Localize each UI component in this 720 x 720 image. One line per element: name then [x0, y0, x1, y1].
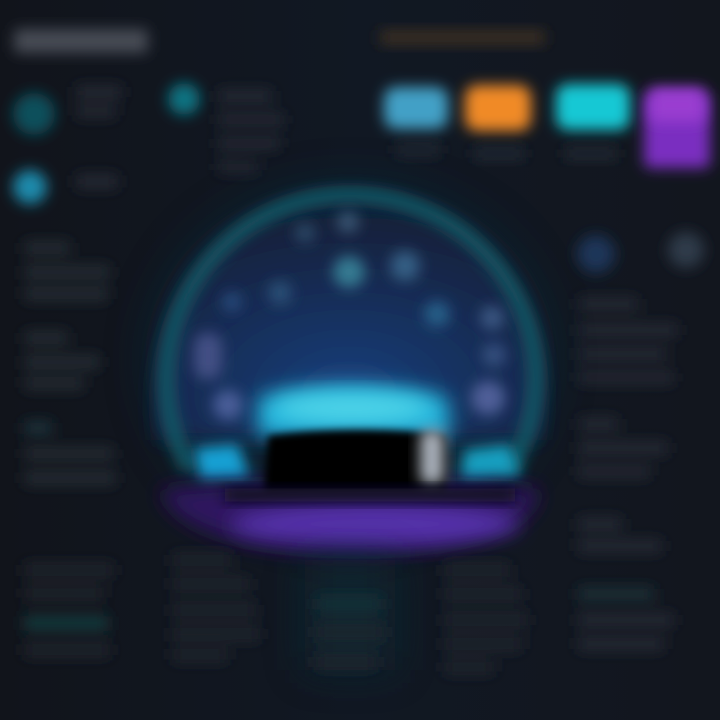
right column text	[577, 232, 704, 650]
left top icons and labels	[13, 83, 284, 204]
black hub	[264, 430, 446, 490]
tab: purple	[644, 92, 710, 168]
left cyan foot	[194, 444, 250, 480]
tab: cyan	[556, 84, 630, 130]
color tabs	[384, 84, 710, 168]
heading	[14, 29, 148, 53]
hub highlight	[420, 430, 444, 484]
purple base	[160, 482, 540, 552]
top orange heading	[380, 30, 545, 45]
icon: bright blue circle	[13, 170, 47, 204]
icon: right blue blob	[577, 235, 615, 273]
gauge dome	[156, 195, 543, 440]
icon: small teal circle	[168, 83, 200, 115]
gauge tick marks	[194, 211, 506, 420]
bottom column text	[24, 554, 528, 673]
tab: blue	[384, 87, 448, 129]
right cyan foot	[460, 444, 520, 480]
tab: orange	[465, 85, 531, 131]
icon: teal circle	[13, 93, 55, 135]
lower centre glow	[305, 560, 395, 670]
left column text	[24, 242, 116, 484]
gauge needle: bright cyan band	[258, 384, 450, 436]
gauge outer ring	[166, 195, 536, 470]
dark strip under hub	[225, 488, 515, 502]
gauge	[145, 180, 555, 552]
gauge glow	[145, 180, 555, 540]
label blocks near icons	[76, 86, 284, 188]
icon: right grey blob	[668, 232, 704, 268]
tab captions	[396, 144, 617, 159]
